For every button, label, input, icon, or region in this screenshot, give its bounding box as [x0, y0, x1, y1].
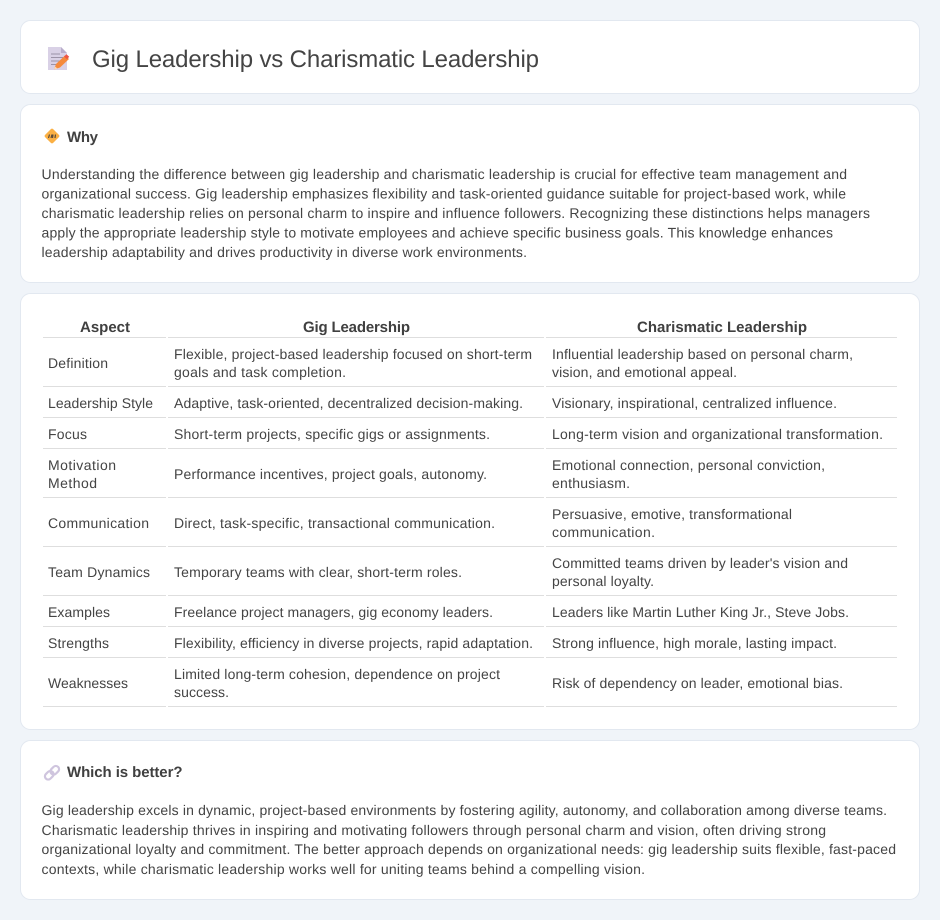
- row: definition: goals and task completion.: [174, 364, 346, 380]
- row: motivation method: enthusiasm.: [552, 475, 630, 491]
- text block: why paragraph: organizational success. Gig leadership emphasizes flexibility and task-oriented guidance suitable for project-based work, while: [42, 186, 846, 202]
- text block: why paragraph: apply the appropriate leadership style to motivate employees and achieve specific business goals. This knowledge enhances: [42, 224, 833, 240]
- row: communication: Direct, task-specific, transactional communication.: [174, 515, 495, 531]
- panel: which is better: [20, 740, 920, 900]
- text block: why paragraph: charismatic leadership relies on personal charm to inspire and influence followers. Recognizing these distinctions helps managers: [42, 205, 870, 221]
- row: examples: Freelance project managers, gig economy leaders.: [174, 604, 493, 620]
- row: team dynamics: Committed teams driven by leader's vision and: [552, 555, 848, 571]
- row: definition: Flexible, project-based leadership focused on short-term: [174, 346, 532, 362]
- row: weaknesses: [48, 666, 843, 700]
- row: focus: Short-term projects, specific gigs or assignments.: [174, 426, 490, 442]
- heading: which is better: Which is better?: [67, 764, 182, 781]
- row: definition: Definition: [48, 355, 108, 371]
- text block: which is better paragraph: contexts, while charismatic leadership works well for uniting teams behind a compelling vision.: [42, 861, 645, 877]
- row: communication: Communication: [48, 515, 149, 531]
- text block: why paragraph: leadership adaptability and drives productivity in diverse work environments.: [42, 244, 527, 260]
- row: examples: [48, 604, 849, 620]
- row: weaknesses: success.: [174, 684, 229, 700]
- row: leadership style: Leadership Style: [48, 395, 153, 411]
- row: team dynamics: [48, 555, 848, 589]
- row: examples: Leaders like Martin Luther King Jr., Steve Jobs.: [552, 604, 849, 620]
- text block: which is better paragraph: [42, 802, 896, 877]
- heading: why: Why: [67, 129, 99, 146]
- text block: why paragraph: Understanding the difference between gig leadership and charismatic leadership is crucial for effective team management and: [42, 166, 847, 182]
- row: motivation method: Performance incentives, project goals, autonomy.: [174, 466, 487, 482]
- panel: why: [20, 104, 920, 282]
- text block: why paragraph: [42, 166, 870, 260]
- row: strengths: Strong influence, high morale, lasting impact.: [552, 635, 837, 651]
- row: motivation method: Emotional connection, personal conviction,: [552, 457, 825, 473]
- row: focus: Focus: [48, 426, 87, 442]
- row: focus: Long-term vision and organizational transformation.: [552, 426, 883, 442]
- row: weaknesses: Weaknesses: [48, 675, 128, 691]
- row: leadership style: [48, 395, 837, 411]
- icon: orange diamond sign: [44, 128, 60, 144]
- panel: title header: [20, 20, 920, 94]
- table header row: Gig Leadership: [303, 319, 410, 336]
- row: strengths: Flexibility, efficiency in diverse projects, rapid adaptation.: [174, 635, 533, 651]
- row: strengths: Strengths: [48, 635, 109, 651]
- row: motivation method: Method: [48, 475, 97, 491]
- row: team dynamics: Temporary teams with clear, short-term roles.: [174, 564, 462, 580]
- row: leadership style: Visionary, inspirational, centralized influence.: [552, 395, 837, 411]
- text block: which is better paragraph: Gig leadership excels in dynamic, project-based environments by fostering agility, autonomy, and collaboration among diverse teams.: [42, 802, 887, 818]
- title: Gig Leadership vs Charismatic Leadership: [92, 46, 539, 73]
- row: motivation method: [48, 457, 825, 491]
- table header row: Aspect: [80, 319, 130, 336]
- text block: which is better paragraph: Charismatic leadership thrives in inspiring and motivating followers through personal charm and vision, often driving strong: [42, 822, 826, 838]
- row: motivation method: Motivation: [48, 457, 116, 473]
- table header row: Charismatic Leadership: [637, 319, 807, 336]
- row: examples: Examples: [48, 604, 110, 620]
- row: leadership style: Adaptive, task-oriented, decentralized decision-making.: [174, 395, 523, 411]
- row: weaknesses: Limited long-term cohesion, dependence on project: [174, 666, 500, 682]
- row: definition: [48, 346, 853, 380]
- row: communication: Persuasive, emotive, transformational: [552, 506, 792, 522]
- row: weaknesses: Risk of dependency on leader, emotional bias.: [552, 675, 843, 691]
- row: definition: vision, and emotional appeal.: [552, 364, 737, 380]
- icon: memo with pencil: [48, 47, 69, 70]
- row: team dynamics: personal loyalty.: [552, 573, 654, 589]
- row: team dynamics: Team Dynamics: [48, 564, 150, 580]
- table header row: [80, 319, 807, 336]
- icon: chain link: [44, 765, 60, 781]
- row: focus: [48, 426, 883, 442]
- row: definition: Influential leadership based on personal charm,: [552, 346, 853, 362]
- row: communication: [48, 506, 792, 540]
- text block: which is better paragraph: organizational loyalty and commitment. The better approach depends on organizational needs: gig leadership suits flexible, fast-paced: [42, 841, 896, 857]
- panel: comparison table: [20, 294, 920, 730]
- row: strengths: [48, 635, 837, 651]
- row: communication: communication.: [552, 524, 655, 540]
